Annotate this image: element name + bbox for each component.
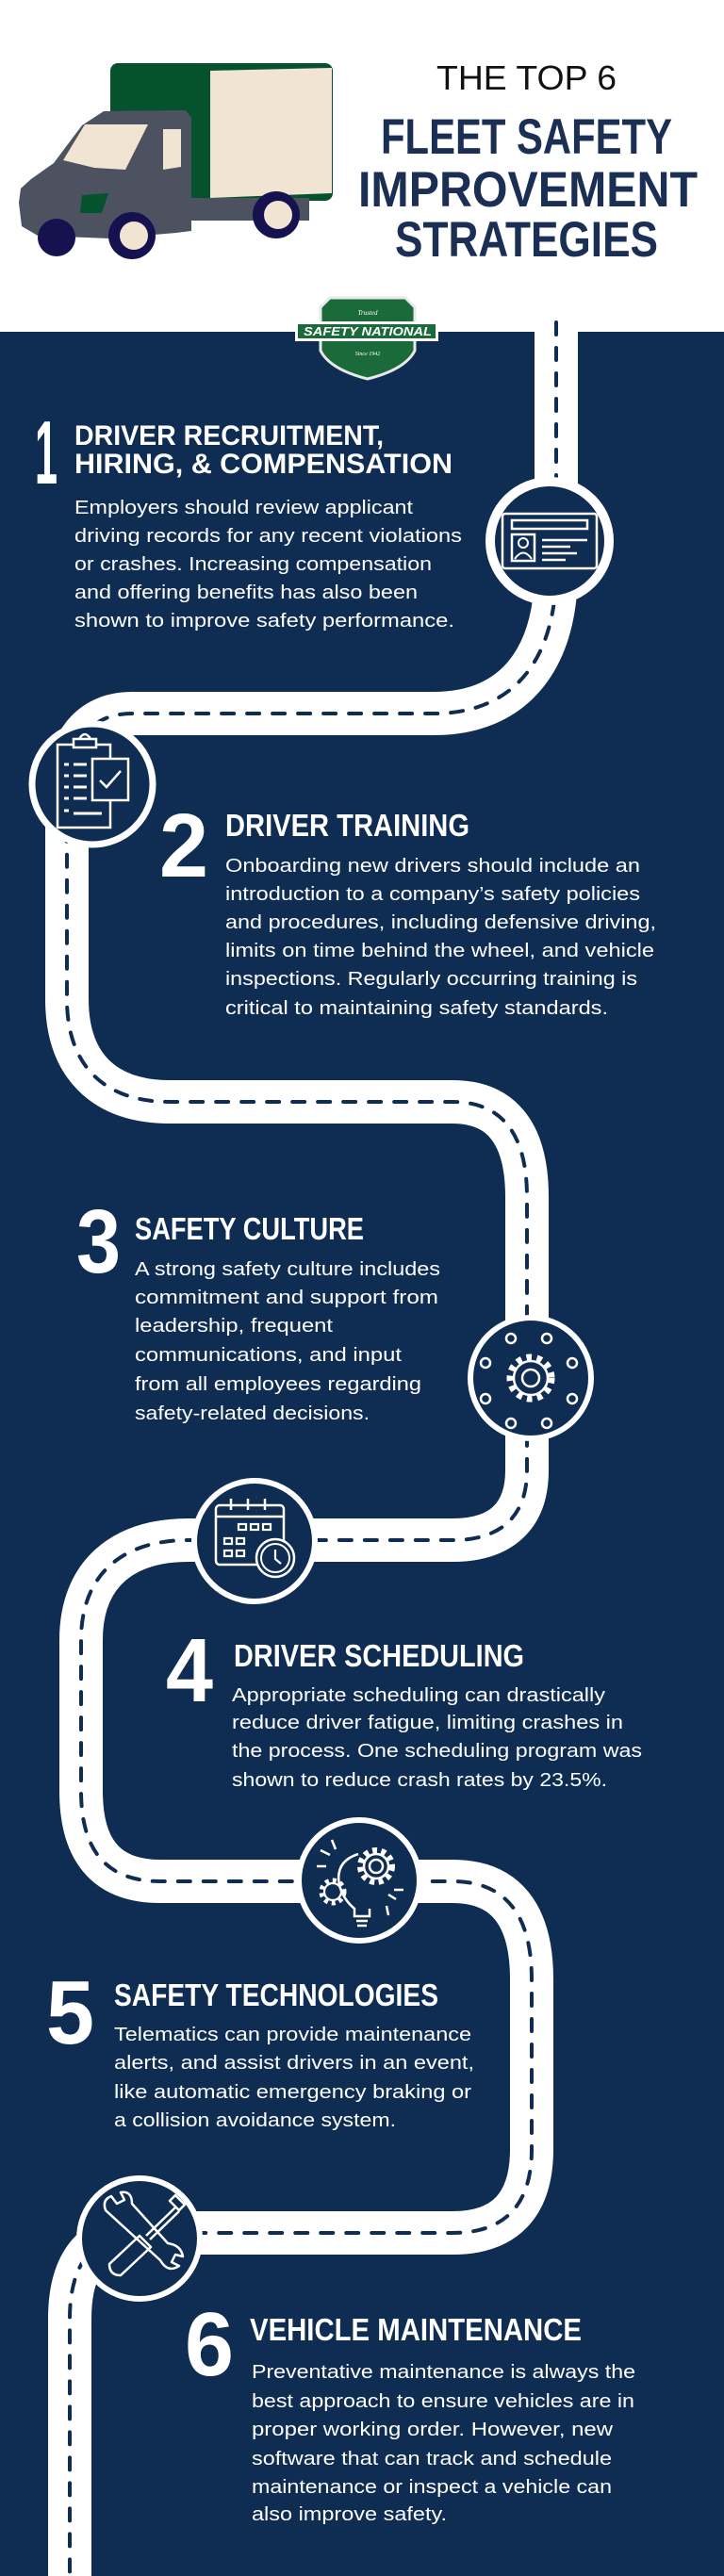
section 4: shown to reduce crash rates by 23.5%. [232, 1770, 607, 1791]
section 1: or crashes. Increasing compensation [74, 554, 432, 575]
section 1: HIRING, & COMPENSATION [74, 449, 452, 480]
section 1: DRIVER RECRUITMENT, [74, 420, 384, 451]
section 6: proper working order. However, new [252, 2420, 614, 2440]
section 2: Onboarding new drivers should include an [225, 856, 640, 877]
section 1 [35, 402, 462, 632]
section 2: 2 [159, 796, 208, 896]
icon circle 5: lightbulb with gears [299, 1820, 420, 1941]
section 5: like automatic emergency braking or [114, 2082, 471, 2103]
logo: Safety National shield: Trusted [357, 309, 378, 317]
section 1: Employers should review applicant [74, 498, 414, 518]
logo: Safety National shield [295, 298, 438, 379]
section 4: the process. One scheduling program was [232, 1741, 642, 1762]
section 3: SAFETY CULTURE [135, 1211, 364, 1246]
title: IMPROVEMENT [358, 162, 698, 218]
title: STRATEGIES [395, 212, 658, 268]
section 6: 6 [185, 2294, 234, 2395]
title [358, 58, 698, 268]
section 1: 1 [35, 402, 58, 503]
section 4: Appropriate scheduling can drastically [232, 1685, 605, 1706]
section 3: A strong safety culture includes [135, 1259, 440, 1280]
section 2: DRIVER TRAINING [225, 808, 469, 843]
road [67, 322, 556, 2576]
section 2: introduction to a company’s safety policies [225, 884, 640, 905]
section 3: commitment and support from [135, 1288, 438, 1308]
section 1: driving records for any recent violations [74, 526, 462, 547]
section 2: critical to maintaining safety standards. [225, 998, 608, 1019]
section 5: 5 [46, 1962, 94, 2063]
icon circle 1: ID card [490, 482, 609, 600]
icon circle 3: gear with people [470, 1318, 591, 1438]
title: THE TOP 6 [436, 58, 617, 97]
section 5: Telematics can provide maintenance [114, 2025, 471, 2045]
section 3 [76, 1191, 440, 1424]
section 3: leadership, frequent [135, 1316, 334, 1337]
section 4: reduce driver fatigue, limiting crashes in [232, 1713, 623, 1733]
section 5 [46, 1962, 474, 2131]
section 5: a collision avoidance system. [114, 2110, 396, 2131]
icon circle 2: clipboard [32, 724, 153, 845]
icon circle 6: wrench and screwdriver [79, 2178, 200, 2299]
section 5: alerts, and assist drivers in an event, [114, 2053, 474, 2074]
icon circle 4: calendar with clock [194, 1481, 315, 1601]
section 3: communications, and input [135, 1345, 403, 1366]
section 6 [185, 2294, 635, 2525]
section 2: limits on time behind the wheel, and vehicle [225, 941, 654, 961]
section 6: maintenance or inspect a vehicle can [252, 2477, 612, 2498]
section 4 [166, 1620, 642, 1791]
section 4: DRIVER SCHEDULING [234, 1638, 524, 1673]
section 6: Preventative maintenance is always the [252, 2362, 635, 2383]
section 6: software that can track and schedule [252, 2449, 612, 2469]
section 2: inspections. Regularly occurring training is [225, 969, 637, 990]
section 2: and procedures, including defensive driving, [225, 912, 656, 933]
section 6: best approach to ensure vehicles are in [252, 2391, 634, 2412]
section 1: shown to improve safety performance. [74, 611, 454, 632]
logo: Safety National shield: Since 1942 [355, 351, 380, 357]
section 6: also improve safety. [252, 2504, 447, 2525]
section 3: safety-related decisions. [135, 1403, 370, 1424]
section 4: 4 [166, 1620, 213, 1721]
section 2 [159, 796, 656, 1019]
section 5: SAFETY TECHNOLOGIES [114, 1977, 438, 2012]
truck illustration [19, 63, 333, 259]
logo: Safety National shield: SAFETY NATIONAL [304, 324, 432, 338]
section 3: from all employees regarding [135, 1374, 421, 1395]
section 3: 3 [76, 1191, 121, 1292]
section 6: VEHICLE MAINTENANCE [250, 2312, 582, 2347]
section 1: and offering benefits has also been [74, 582, 418, 603]
